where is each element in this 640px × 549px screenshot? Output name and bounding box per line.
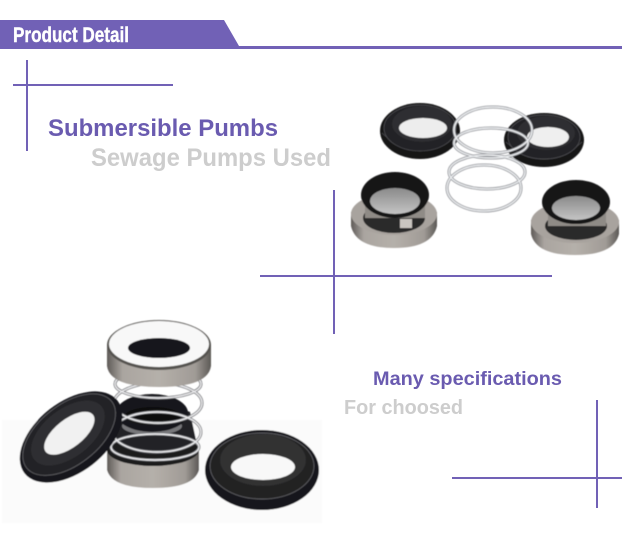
center seal stack [107,320,211,488]
steel spring [111,370,202,460]
product photo: assembled seal with rings [2,320,322,523]
cross lines: top left [13,60,173,151]
header banner [0,20,622,49]
photo backdrop [2,420,322,523]
right assembled seal [531,180,619,255]
right black ring [205,430,319,510]
cross lines: bottom right [452,400,622,508]
product photo: seal parts exploded [351,103,619,255]
subheading: For choosed: For choosed [344,397,463,419]
left black ring [380,103,460,159]
right black ring [504,113,584,167]
top steel cup [107,345,211,387]
left tilted black ring [3,373,139,501]
cross lines: center [260,190,552,334]
left assembled seal [351,172,437,248]
banner title: Product Detail [13,24,129,47]
heading: Submersible Pumbs: Submersible Pumbs [48,115,278,142]
subheading: Sewage Pumps Used: Sewage Pumps Used [91,144,331,172]
silver spring [447,107,532,211]
heading: Many specifications: Many specifications [373,368,562,390]
